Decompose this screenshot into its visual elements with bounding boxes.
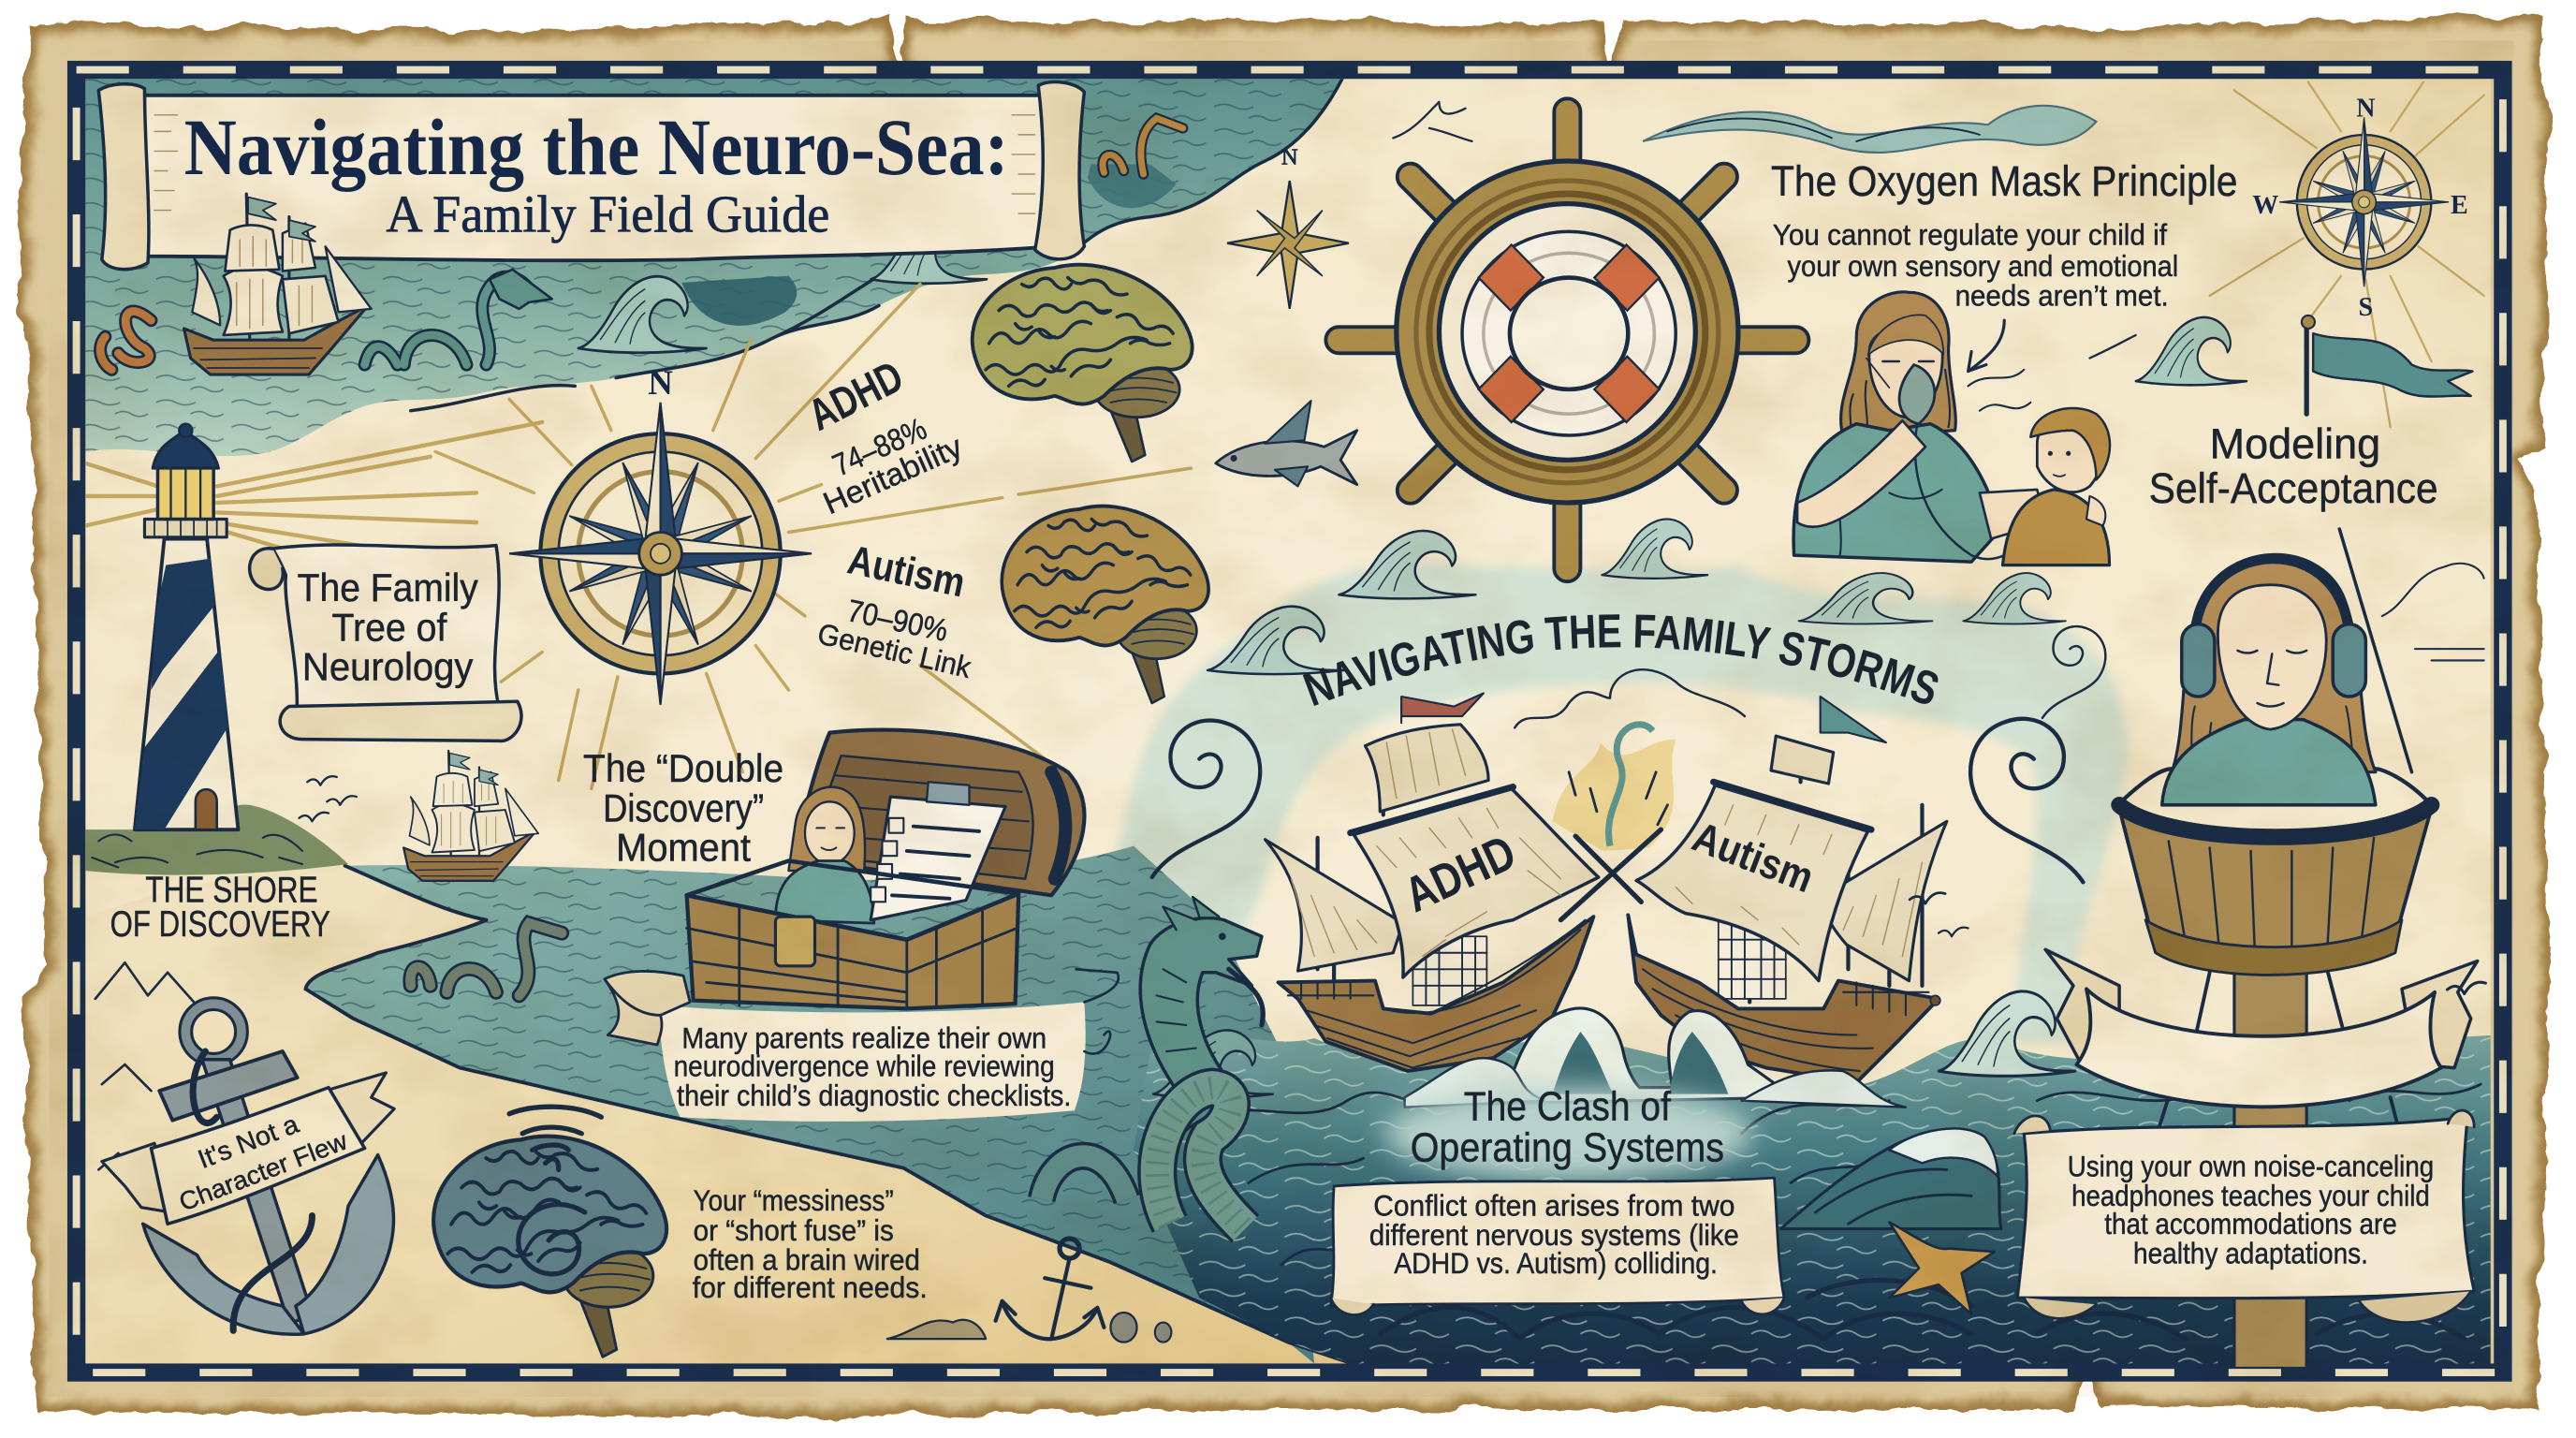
sea: lagoon xyxy=(305,846,1377,1372)
text: headphones description: healthy adaptations. xyxy=(2133,1236,2368,1269)
compass rose: small: S xyxy=(2359,293,2373,322)
rays from small compass xyxy=(2210,82,2484,427)
text: family tree heading: Neurology xyxy=(302,644,473,688)
text: modeling self-acceptance: Modeling xyxy=(2210,420,2380,468)
text: messiness description: Your “messiness” xyxy=(694,1183,894,1217)
text: headphones description: Using your own noise-canceling xyxy=(2068,1149,2434,1182)
small wisps near oxygen xyxy=(1969,370,2030,411)
label: Autism genetic link: Genetic Link xyxy=(814,616,974,684)
chest: checklist clipboard xyxy=(871,782,1005,920)
text: oxygen mask description: You cannot regulate your child if xyxy=(1773,217,2167,251)
anchor xyxy=(102,1004,394,1334)
brain: storm with tornado xyxy=(433,1107,666,1357)
crow's nest bucket xyxy=(2117,769,2432,975)
scroll: family tree xyxy=(250,545,521,741)
text: clash heading: Operating Systems xyxy=(1411,1125,1724,1171)
text: oxygen mask description: needs aren’t met. xyxy=(1955,278,2169,312)
sea: main stormy sea xyxy=(1134,1034,2497,1372)
ship: top-left galleon xyxy=(184,194,372,374)
sand: lower-left shore xyxy=(79,866,1377,1372)
compass rose: small: W xyxy=(2252,191,2278,220)
compass label: N: N xyxy=(648,363,673,402)
serpent: top sea creature xyxy=(1103,118,1183,174)
figure: woman with headphones xyxy=(2162,554,2376,805)
icon: wave curl xyxy=(2089,317,2247,385)
label: Autism genetic link: Autism xyxy=(843,536,969,607)
icon: small mountains xyxy=(95,962,194,1176)
text: not a character flaw: Character Flew xyxy=(175,1125,351,1216)
text: oxygen mask description: your own sensory and emotional xyxy=(1788,249,2178,283)
icon: headphones xyxy=(2182,559,2365,697)
text: messiness description: often a brain wired xyxy=(694,1242,920,1276)
compass rose: small: N xyxy=(2356,95,2375,124)
blank ribbon banner xyxy=(2045,949,2478,1107)
ship: small galleon xyxy=(403,751,538,881)
lower sea swell xyxy=(1153,991,2075,1229)
text: family tree heading: Tree of xyxy=(332,605,447,649)
text: shore of discovery: OF DISCOVERY xyxy=(110,904,330,945)
icon: top sea wisp and fish xyxy=(1393,102,2097,153)
serpent: orange coil xyxy=(100,311,151,370)
text: family tree heading xyxy=(298,565,478,688)
scroll: clash description xyxy=(1331,1178,1784,1314)
text: double discovery description xyxy=(674,1021,1071,1112)
label: ADHD heritability xyxy=(800,352,968,521)
text: double discovery description: neurodivergence while reviewing xyxy=(674,1049,1055,1082)
label: ADHD heritability: Heritability xyxy=(818,430,968,521)
text: shore of discovery xyxy=(110,870,330,945)
birds by small ship xyxy=(299,776,357,821)
serpent: body in waves xyxy=(1042,1088,1245,1229)
label: ADHD heritability: ADHD xyxy=(800,352,911,441)
text: clash description: different nervous systems (like xyxy=(1369,1218,1739,1252)
brain: ADHD xyxy=(973,265,1193,462)
text: double discovery heading xyxy=(583,746,783,869)
icon: arrow to mask xyxy=(1969,320,2004,372)
title scroll xyxy=(98,82,1084,270)
text: clash description: ADHD vs. Autism) colliding. xyxy=(1394,1246,1718,1280)
treasure chest xyxy=(687,730,1084,1008)
birds and clouds at right xyxy=(1910,564,2485,994)
crow's nest pole xyxy=(2339,529,2411,772)
crest waves around heading xyxy=(1208,520,2066,674)
sea: top-left waters xyxy=(79,76,1344,456)
serpent: lagoon xyxy=(410,923,562,995)
figure: child xyxy=(2002,408,2110,565)
storm wash around heading xyxy=(1117,562,2128,1043)
scroll: double discovery description xyxy=(605,969,1119,1122)
text: double discovery heading: Discovery” xyxy=(603,785,764,829)
compass rose: small: E xyxy=(2451,191,2468,220)
crossed bowsprits xyxy=(1560,829,1661,920)
serpent: green dragon xyxy=(365,270,552,365)
text: double discovery description: their child’s diagnostic checklists. xyxy=(677,1078,1071,1112)
text: Autism sail label: Autism xyxy=(1687,813,1820,902)
text: messiness description: or “short fuse” is xyxy=(694,1213,894,1247)
text: family tree heading: The Family xyxy=(298,565,478,609)
text: ADHD sail label: ADHD xyxy=(1397,825,1524,923)
text: double discovery heading: The “Double xyxy=(583,746,783,790)
figure: parent with oxygen mask xyxy=(1793,292,2045,562)
text: oxygen mask heading: The Oxygen Mask Principle xyxy=(1771,157,2237,205)
text: messiness description: for different needs. xyxy=(693,1270,928,1304)
wave crest beside ship xyxy=(577,255,988,354)
icon: small anchor and rocks xyxy=(887,1239,1171,1343)
clash heading glow xyxy=(1385,1088,1753,1180)
ship: Autism xyxy=(1628,697,1947,1082)
text: clash description: Conflict often arises from two xyxy=(1373,1189,1734,1222)
text: messiness description xyxy=(693,1183,928,1304)
label: ADHD heritability: 74–88% xyxy=(827,412,932,484)
rays from compass xyxy=(435,285,1191,788)
heading: navigating the family storms: NAVIGATING THE FAMILY STORMS xyxy=(1303,614,1938,706)
icon: flying fish xyxy=(1216,401,1357,486)
mast xyxy=(2139,961,2415,1380)
title text: Navigating the Neuro-Sea: xyxy=(184,102,1009,192)
text: clash description xyxy=(1369,1189,1739,1280)
icon: flag xyxy=(2302,315,2472,414)
star: gold north marker: N xyxy=(1281,144,1298,169)
chest: parent figure xyxy=(775,787,874,923)
text: modeling self-acceptance: Self-Acceptance xyxy=(2149,464,2438,512)
label: Autism genetic link: 70–90% xyxy=(844,594,951,649)
clouds and flames between ships xyxy=(1515,669,1745,851)
compass rose: small xyxy=(2252,95,2468,322)
crashing white waves xyxy=(1405,1008,1906,1108)
storm swirls xyxy=(1152,626,2105,882)
brain: Autism xyxy=(1002,506,1208,703)
text: headphones description: headphones teaches your child xyxy=(2071,1179,2430,1212)
text: headphones description xyxy=(2068,1149,2434,1269)
text: clash heading xyxy=(1411,1084,1724,1171)
text: modeling self-acceptance xyxy=(2149,420,2438,512)
text: clash heading: The Clash of xyxy=(1464,1084,1672,1130)
wheel with life ring xyxy=(1325,98,1808,581)
scroll: headphones description xyxy=(2014,1110,2474,1323)
text: shore of discovery: THE SHORE xyxy=(145,870,318,910)
compass rose: large xyxy=(509,403,812,705)
life ring xyxy=(1462,231,1676,435)
subtitle text: A Family Field Guide xyxy=(386,185,829,243)
label: Autism genetic link xyxy=(814,536,974,684)
text: headphones description: that accommodations are xyxy=(2104,1207,2397,1240)
text: double discovery heading: Moment xyxy=(616,825,751,869)
lighthouse xyxy=(85,422,542,875)
ship: ADHD xyxy=(1265,693,1599,1071)
star: gold north marker xyxy=(1227,144,1349,309)
text: not a character flaw: It's Not a xyxy=(194,1109,302,1174)
text: double discovery description: Many parents realize their own xyxy=(681,1021,1046,1055)
icon: starfish xyxy=(1889,1223,1995,1314)
ribbon xyxy=(102,1073,394,1224)
serpent: large green dragon xyxy=(1140,897,1263,1088)
text: oxygen mask description xyxy=(1773,217,2178,312)
